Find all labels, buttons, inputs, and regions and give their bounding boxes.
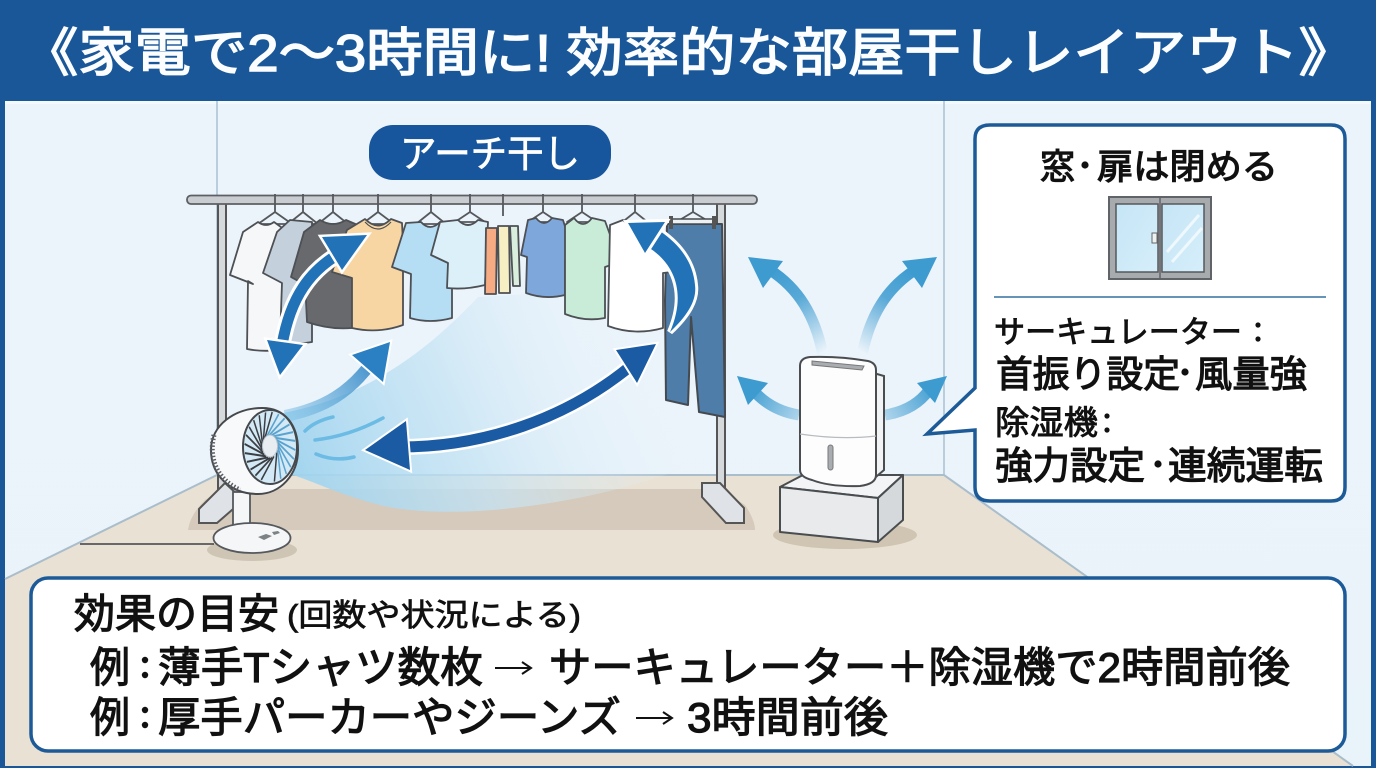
callout heading: 扉は閉める (1097, 148, 1278, 187)
callout panel (927, 125, 1345, 501)
hangers (258, 194, 713, 224)
jeans (665, 216, 725, 417)
drying rack (187, 196, 757, 523)
effect heading: 効果の目安 (74, 591, 279, 637)
dehumidifier heading: 除湿機 (995, 404, 1098, 441)
arrow: double arch left (267, 235, 367, 375)
t-shirt light blue (392, 222, 452, 321)
t-shirt blue (521, 218, 574, 297)
effect note: (回数や状況による) (287, 598, 581, 633)
effect panel (31, 578, 1345, 751)
clothes on hangers (230, 194, 725, 417)
small pants: cream (498, 226, 510, 293)
air stream from fan (283, 290, 745, 512)
small pants: orange (485, 228, 497, 294)
example: thin t-shirt: 例 (90, 644, 130, 691)
callout heading: 窓 (1040, 148, 1075, 187)
circulator setting: 風量強 (1195, 354, 1307, 395)
example: thick hoodie: 例 (90, 694, 130, 741)
room: floor (5, 475, 1353, 766)
example: thin t-shirt: サーキュレーター＋除湿機で2時間前後 (549, 644, 1290, 691)
example: thick hoodie: 厚手パーカーやジーンズ (158, 694, 621, 741)
arch pill label (369, 125, 611, 180)
dehumidifier setting: 強力設定 (995, 446, 1145, 488)
icon: window (1109, 197, 1211, 279)
t-shirt orange collar (365, 222, 391, 229)
circulator setting: 首振り設定 (996, 354, 1180, 395)
dehumidifier arrows (737, 257, 947, 415)
dehumidifier on box (773, 357, 917, 549)
example: thin t-shirt: 薄手Tシャツ数枚 (158, 644, 483, 691)
t-shirt mint (565, 218, 620, 319)
small pants: mint (510, 226, 520, 286)
arrow: long double (365, 344, 656, 470)
arch pill label: アーチ干し (400, 134, 580, 176)
dehumidifier setting: 連続運転 (1168, 446, 1323, 488)
example: thick hoodie: 3時間前後 (687, 694, 888, 741)
arrow: curved up over jeans (628, 222, 695, 332)
arrow: fan air upward (285, 342, 390, 416)
t-shirt white right (608, 220, 672, 332)
t-shirt dark (291, 220, 360, 328)
t-shirt grey (263, 220, 312, 343)
example: thick hoodie (90, 694, 888, 741)
circulator heading: サーキュレーター (994, 315, 1242, 350)
circulator setting (996, 354, 1307, 395)
title: 《家電で2〜3時間に! 効率的な部屋干しレイアウト》 (22, 25, 1355, 83)
example: thin t-shirt (90, 644, 1290, 691)
circulator fan (80, 405, 383, 561)
t-shirt orange (332, 219, 404, 330)
t-shirt pale blue (431, 220, 488, 289)
dehumidifier setting (995, 446, 1323, 488)
t-shirt white (230, 222, 285, 351)
